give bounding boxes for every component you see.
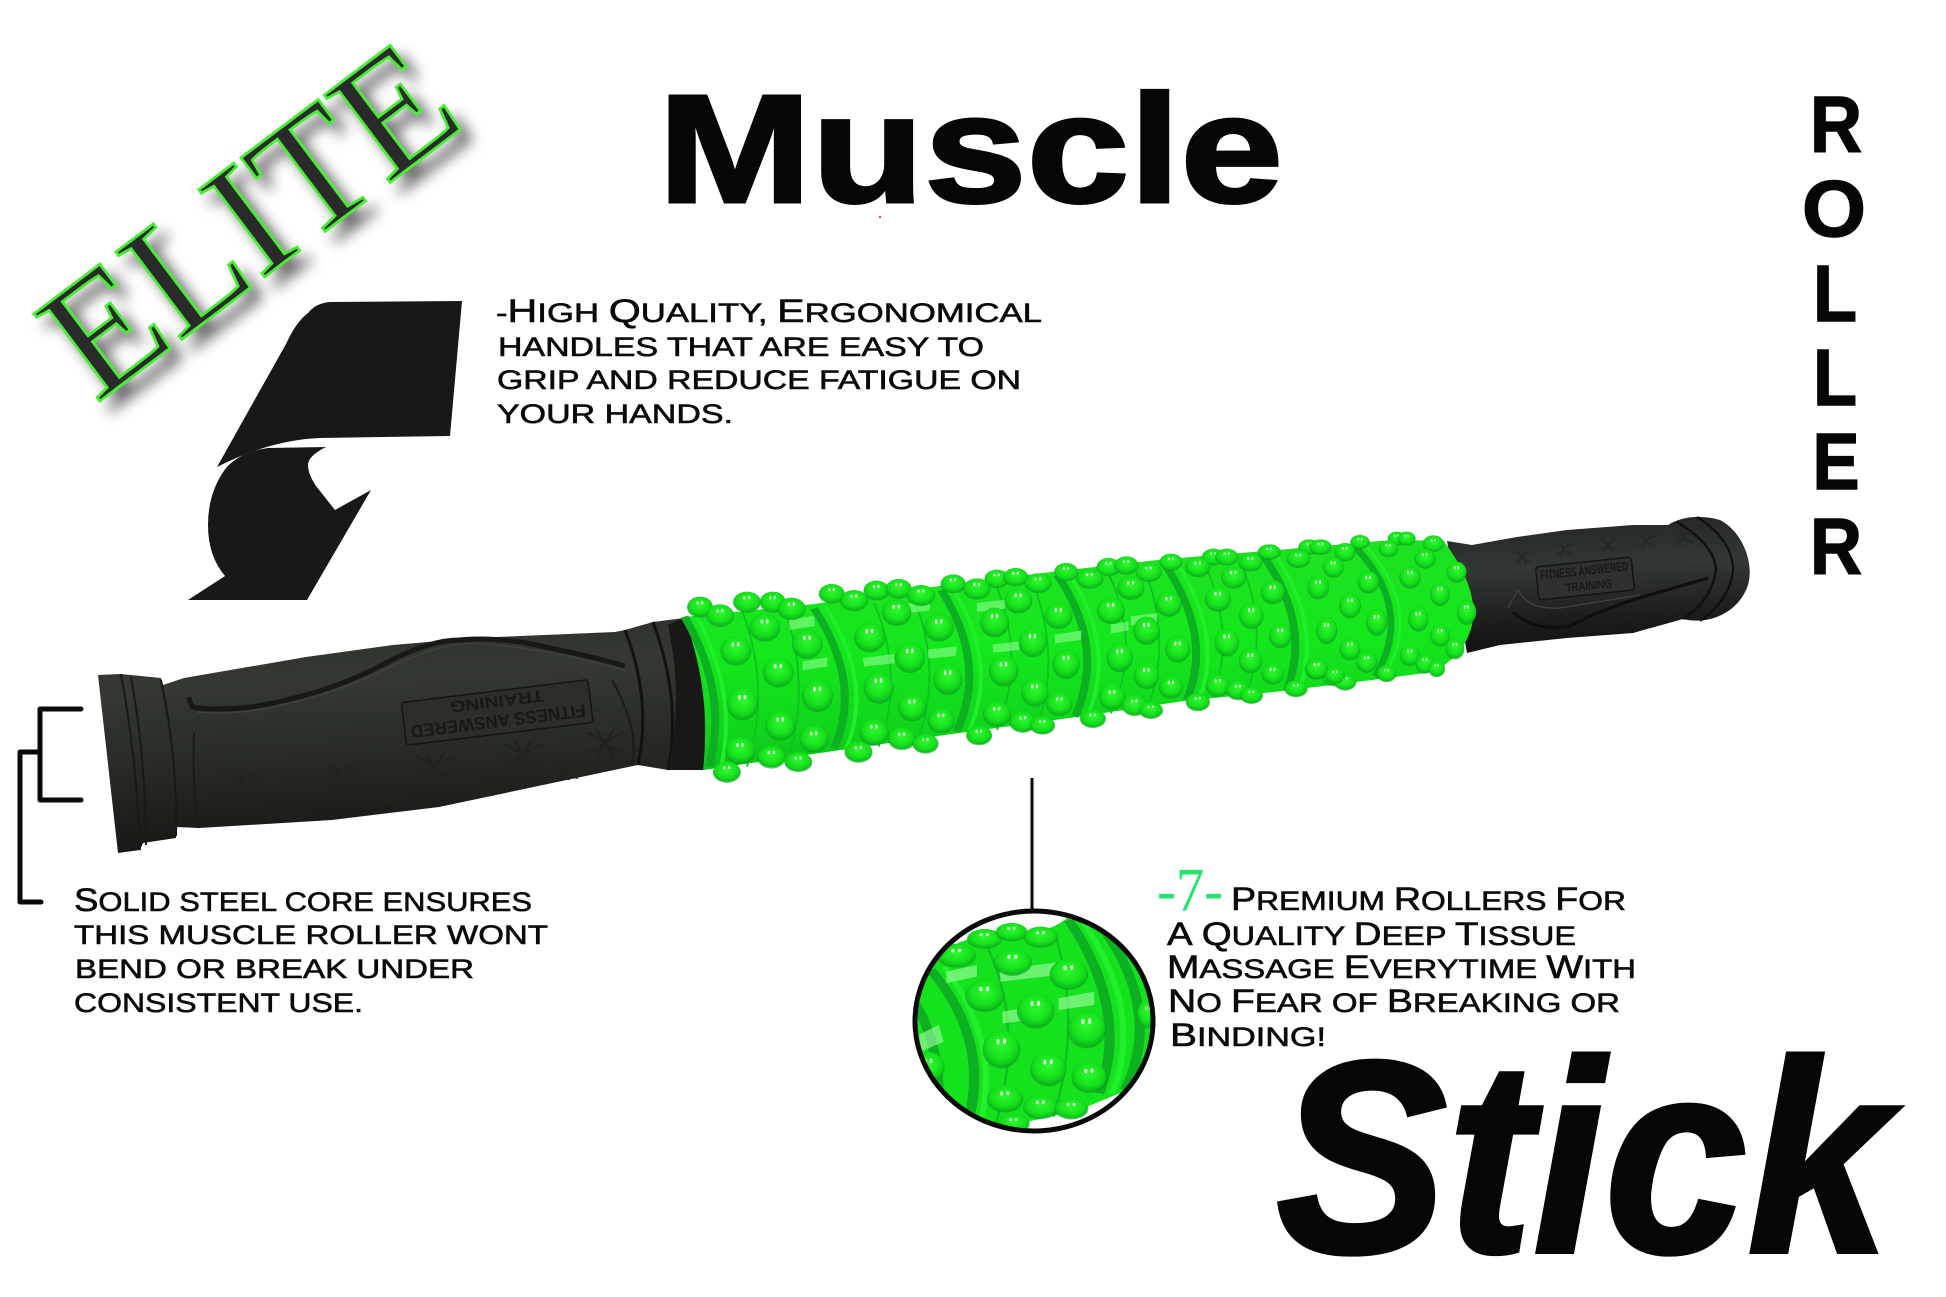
highlight number -7-: -7- — [1157, 857, 1223, 925]
vertical title: ROLLER: O — [1802, 164, 1866, 253]
right handle label: FITNESS ANSWERED — [1540, 558, 1629, 583]
text: handles callout: YOUR HANDS. — [497, 399, 733, 429]
text: steel core callout: THIS MUSCLE ROLLER WONT — [74, 920, 548, 950]
vertical title: ROLLER: L — [1813, 249, 1857, 338]
text: steel core callout: BEND OR BREAK UNDER — [75, 954, 474, 984]
text: steel core callout — [74, 882, 548, 1018]
badge: ELITE: ELITE — [7, 5, 490, 434]
lens bumps — [924, 923, 1150, 1128]
text: seven rollers callout — [1157, 857, 1636, 1053]
left handle label: FITNESS ANSWERED — [410, 700, 587, 742]
lens outline — [915, 911, 1153, 1131]
lens green fill — [918, 918, 1150, 1124]
text: handles callout: GRIP AND REDUCE FATIGUE ON — [497, 365, 1021, 395]
vertical title: ROLLER — [1802, 80, 1866, 591]
left handle label: TRAINING — [449, 686, 544, 715]
text: seven rollers callout: MASSAGE EVERYTIME WITH — [1167, 949, 1636, 985]
glossy highlights — [788, 600, 1158, 670]
right handle grip stars — [1513, 529, 1693, 565]
green roller body — [684, 540, 1473, 770]
title: Muscle: Muscle — [658, 63, 1283, 235]
roller rings and bumps: rollers 1 to 6 — [684, 539, 1356, 783]
text: steel core callout: CONSISTENT USE. — [74, 988, 363, 1018]
vertical title: ROLLER: R — [1810, 80, 1862, 169]
bracket arrow: steel core — [20, 709, 81, 902]
text: steel core callout: SOLID STEEL CORE ENSURES — [74, 882, 532, 918]
vertical title: ROLLER: R — [1810, 502, 1862, 591]
text: handles callout: HANDLES THAT ARE EASY TO — [498, 332, 984, 362]
roller 7 ring and bumps — [1305, 532, 1476, 684]
bumps — [687, 539, 1356, 783]
detail lens: close-up roller — [911, 900, 1166, 1134]
text: seven rollers callout: NO FEAR OF BREAKING OR — [1168, 983, 1620, 1019]
left handle — [98, 614, 716, 853]
right handle label: TRAINING — [1565, 576, 1612, 595]
vertical title: ROLLER: L — [1813, 333, 1857, 422]
connector line to detail — [1030, 778, 1034, 912]
vertical title: ROLLER: E — [1812, 417, 1860, 506]
product: muscle roller stick — [98, 517, 1750, 853]
right handle label — [1536, 557, 1635, 600]
left handle label — [401, 680, 593, 745]
text: seven rollers callout: PREMIUM ROLLERS FOR — [1231, 881, 1626, 917]
text: handles callout: -HIGH Q UALITY, ERGONOMICAL — [496, 293, 1042, 329]
icon: brand logo — [188, 301, 462, 600]
text: seven rollers callout: A QUALITY DEEP TISSUE — [1167, 916, 1576, 952]
text: seven rollers callout: BINDING! — [1170, 1017, 1326, 1053]
lens highlights — [918, 962, 1094, 1052]
right handle — [1447, 517, 1750, 653]
text: handles callout — [496, 293, 1042, 429]
lens rings — [913, 917, 1140, 1127]
left handle grip stars — [229, 729, 623, 819]
